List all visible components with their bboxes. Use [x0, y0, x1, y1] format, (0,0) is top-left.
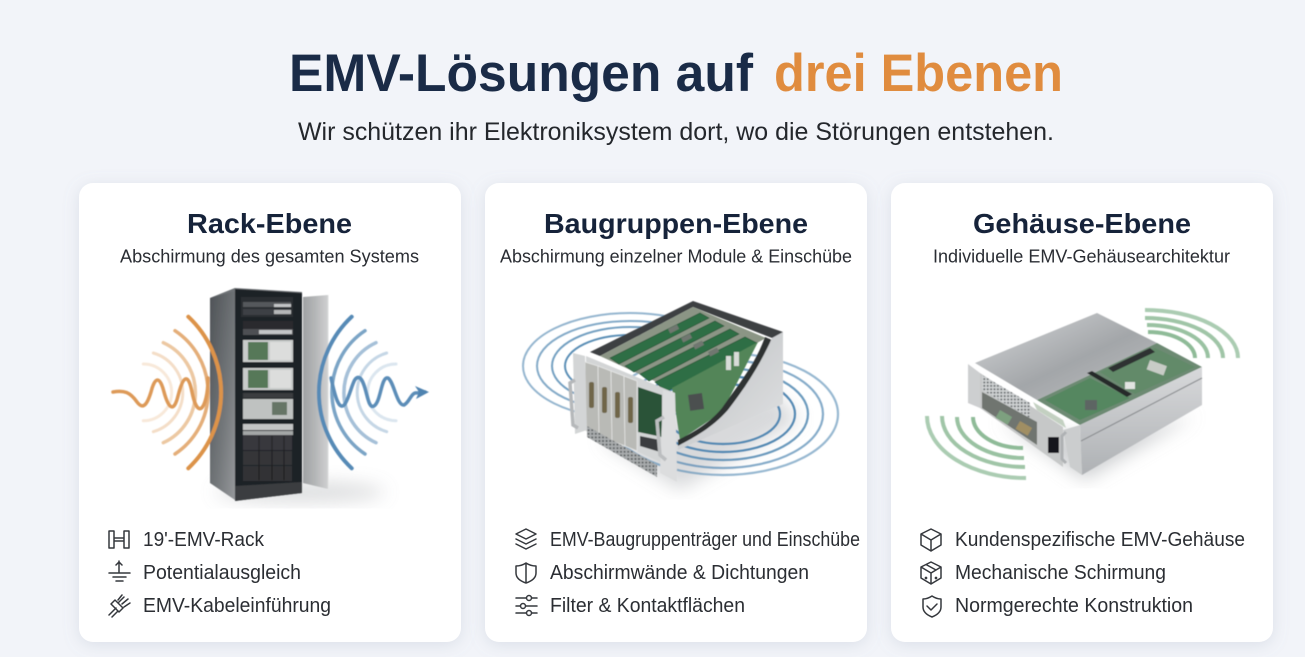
- front panel: [980, 373, 1063, 467]
- icon: sliders: [516, 596, 537, 616]
- floor shadow: [600, 390, 800, 490]
- title: EMV-Lösungen auf: [289, 44, 753, 103]
- chips: [1085, 400, 1097, 410]
- green waves top right: [1145, 310, 1238, 358]
- icon: package: [921, 562, 941, 584]
- label: subracks: EMV-Baugruppenträger und Einschübe: [550, 529, 860, 551]
- green waves bottom left: [927, 416, 1026, 478]
- chip details: [668, 324, 719, 356]
- panel: Gehäuse-Ebene: [891, 183, 1273, 642]
- blue rings right: [608, 353, 838, 475]
- illustration: rack with interference waves: [113, 288, 429, 502]
- orange incoming arcs: [143, 317, 221, 468]
- connectors: [982, 392, 1037, 445]
- front plug-in cards: [585, 362, 637, 451]
- subheading: Abschirmung einzelner Module & Einschübe: [500, 246, 852, 266]
- panel: Rack-Ebene: [79, 183, 461, 642]
- illustration: enclosure with green waves: [927, 310, 1238, 480]
- heading: Baugruppen-Ebene: [544, 208, 808, 239]
- feature list: [516, 529, 860, 617]
- feature list: [109, 529, 331, 617]
- title: drei Ebenen: [774, 44, 1063, 103]
- subheading: Abschirmung des gesamten Systems: [120, 246, 419, 266]
- label: filters: Filter & Kontaktflächen: [550, 595, 745, 617]
- right flange: [1063, 425, 1082, 475]
- lid: [975, 313, 1157, 400]
- lower side: [1080, 367, 1202, 475]
- blue wave with arrow: [331, 377, 425, 406]
- vent mesh: [982, 375, 1030, 418]
- label: 19-inch rack: 19'-EMV-Rack: [143, 529, 265, 551]
- open door: [303, 295, 328, 489]
- heading: Rack-Ebene: [187, 208, 352, 239]
- label: custom enclosures: Kundenspezifische EMV-Gehäuse: [955, 529, 1245, 551]
- label: shield walls: Abschirmwände & Dichtungen: [550, 562, 809, 584]
- power socket: [1048, 437, 1059, 453]
- title: [289, 44, 1063, 103]
- icon: shield check: [923, 596, 941, 617]
- left flange: [968, 364, 980, 408]
- icon: grounding: [109, 561, 130, 581]
- large green board: [672, 342, 758, 440]
- floor shadow: [215, 482, 385, 502]
- orange wave: [113, 378, 208, 409]
- circuit boards: [610, 313, 757, 392]
- icon: layers: [516, 529, 536, 549]
- illustration: subrack with rings: [523, 301, 838, 490]
- label: mechanical shielding: Mechanische Schirmung: [955, 562, 1166, 584]
- panel: Baugruppen-Ebene: [485, 183, 867, 642]
- perforated rail: [587, 426, 657, 477]
- card background: [891, 183, 1273, 642]
- rack side: [210, 288, 235, 500]
- icon: rack frame: [109, 531, 129, 548]
- icon: cable entry: [109, 595, 130, 617]
- heading: Gehäuse-Ebene: [973, 208, 1191, 239]
- label: potential equalisation: Potentialausgleich: [143, 562, 301, 584]
- open PCB bay: [1037, 343, 1202, 425]
- feature list: [921, 529, 1245, 617]
- floor shadow: [1000, 415, 1195, 480]
- rack front: [235, 289, 302, 501]
- blue rings left: [523, 313, 737, 419]
- chassis top frame: [590, 301, 783, 356]
- right handle: [657, 417, 666, 460]
- subheading: Individuelle EMV-Gehäusearchitektur: [933, 246, 1230, 266]
- left flange: [573, 353, 587, 434]
- blue outgoing arcs: [319, 317, 396, 468]
- rack top: [210, 288, 302, 298]
- icon: shield: [516, 563, 536, 583]
- icon: box: [921, 529, 941, 551]
- label: cable entry: EMV-Kabeleinführung: [143, 595, 331, 617]
- black divider: [1087, 371, 1132, 397]
- card background: [79, 183, 461, 642]
- right flange: [660, 390, 677, 482]
- card connectors: [589, 382, 633, 423]
- board bay: [600, 307, 766, 389]
- silver side plate: [678, 332, 783, 450]
- rack units: [241, 297, 293, 481]
- black gasket: [678, 337, 772, 446]
- left handle: [570, 380, 578, 428]
- label: standard compliant: Normgerechte Konstruktion: [955, 595, 1193, 617]
- subtitle: Wir schützen ihr Elektroniksystem dort, wo die Störungen entstehen.: [298, 118, 1054, 146]
- card background: [485, 183, 867, 642]
- front bay: [586, 356, 677, 470]
